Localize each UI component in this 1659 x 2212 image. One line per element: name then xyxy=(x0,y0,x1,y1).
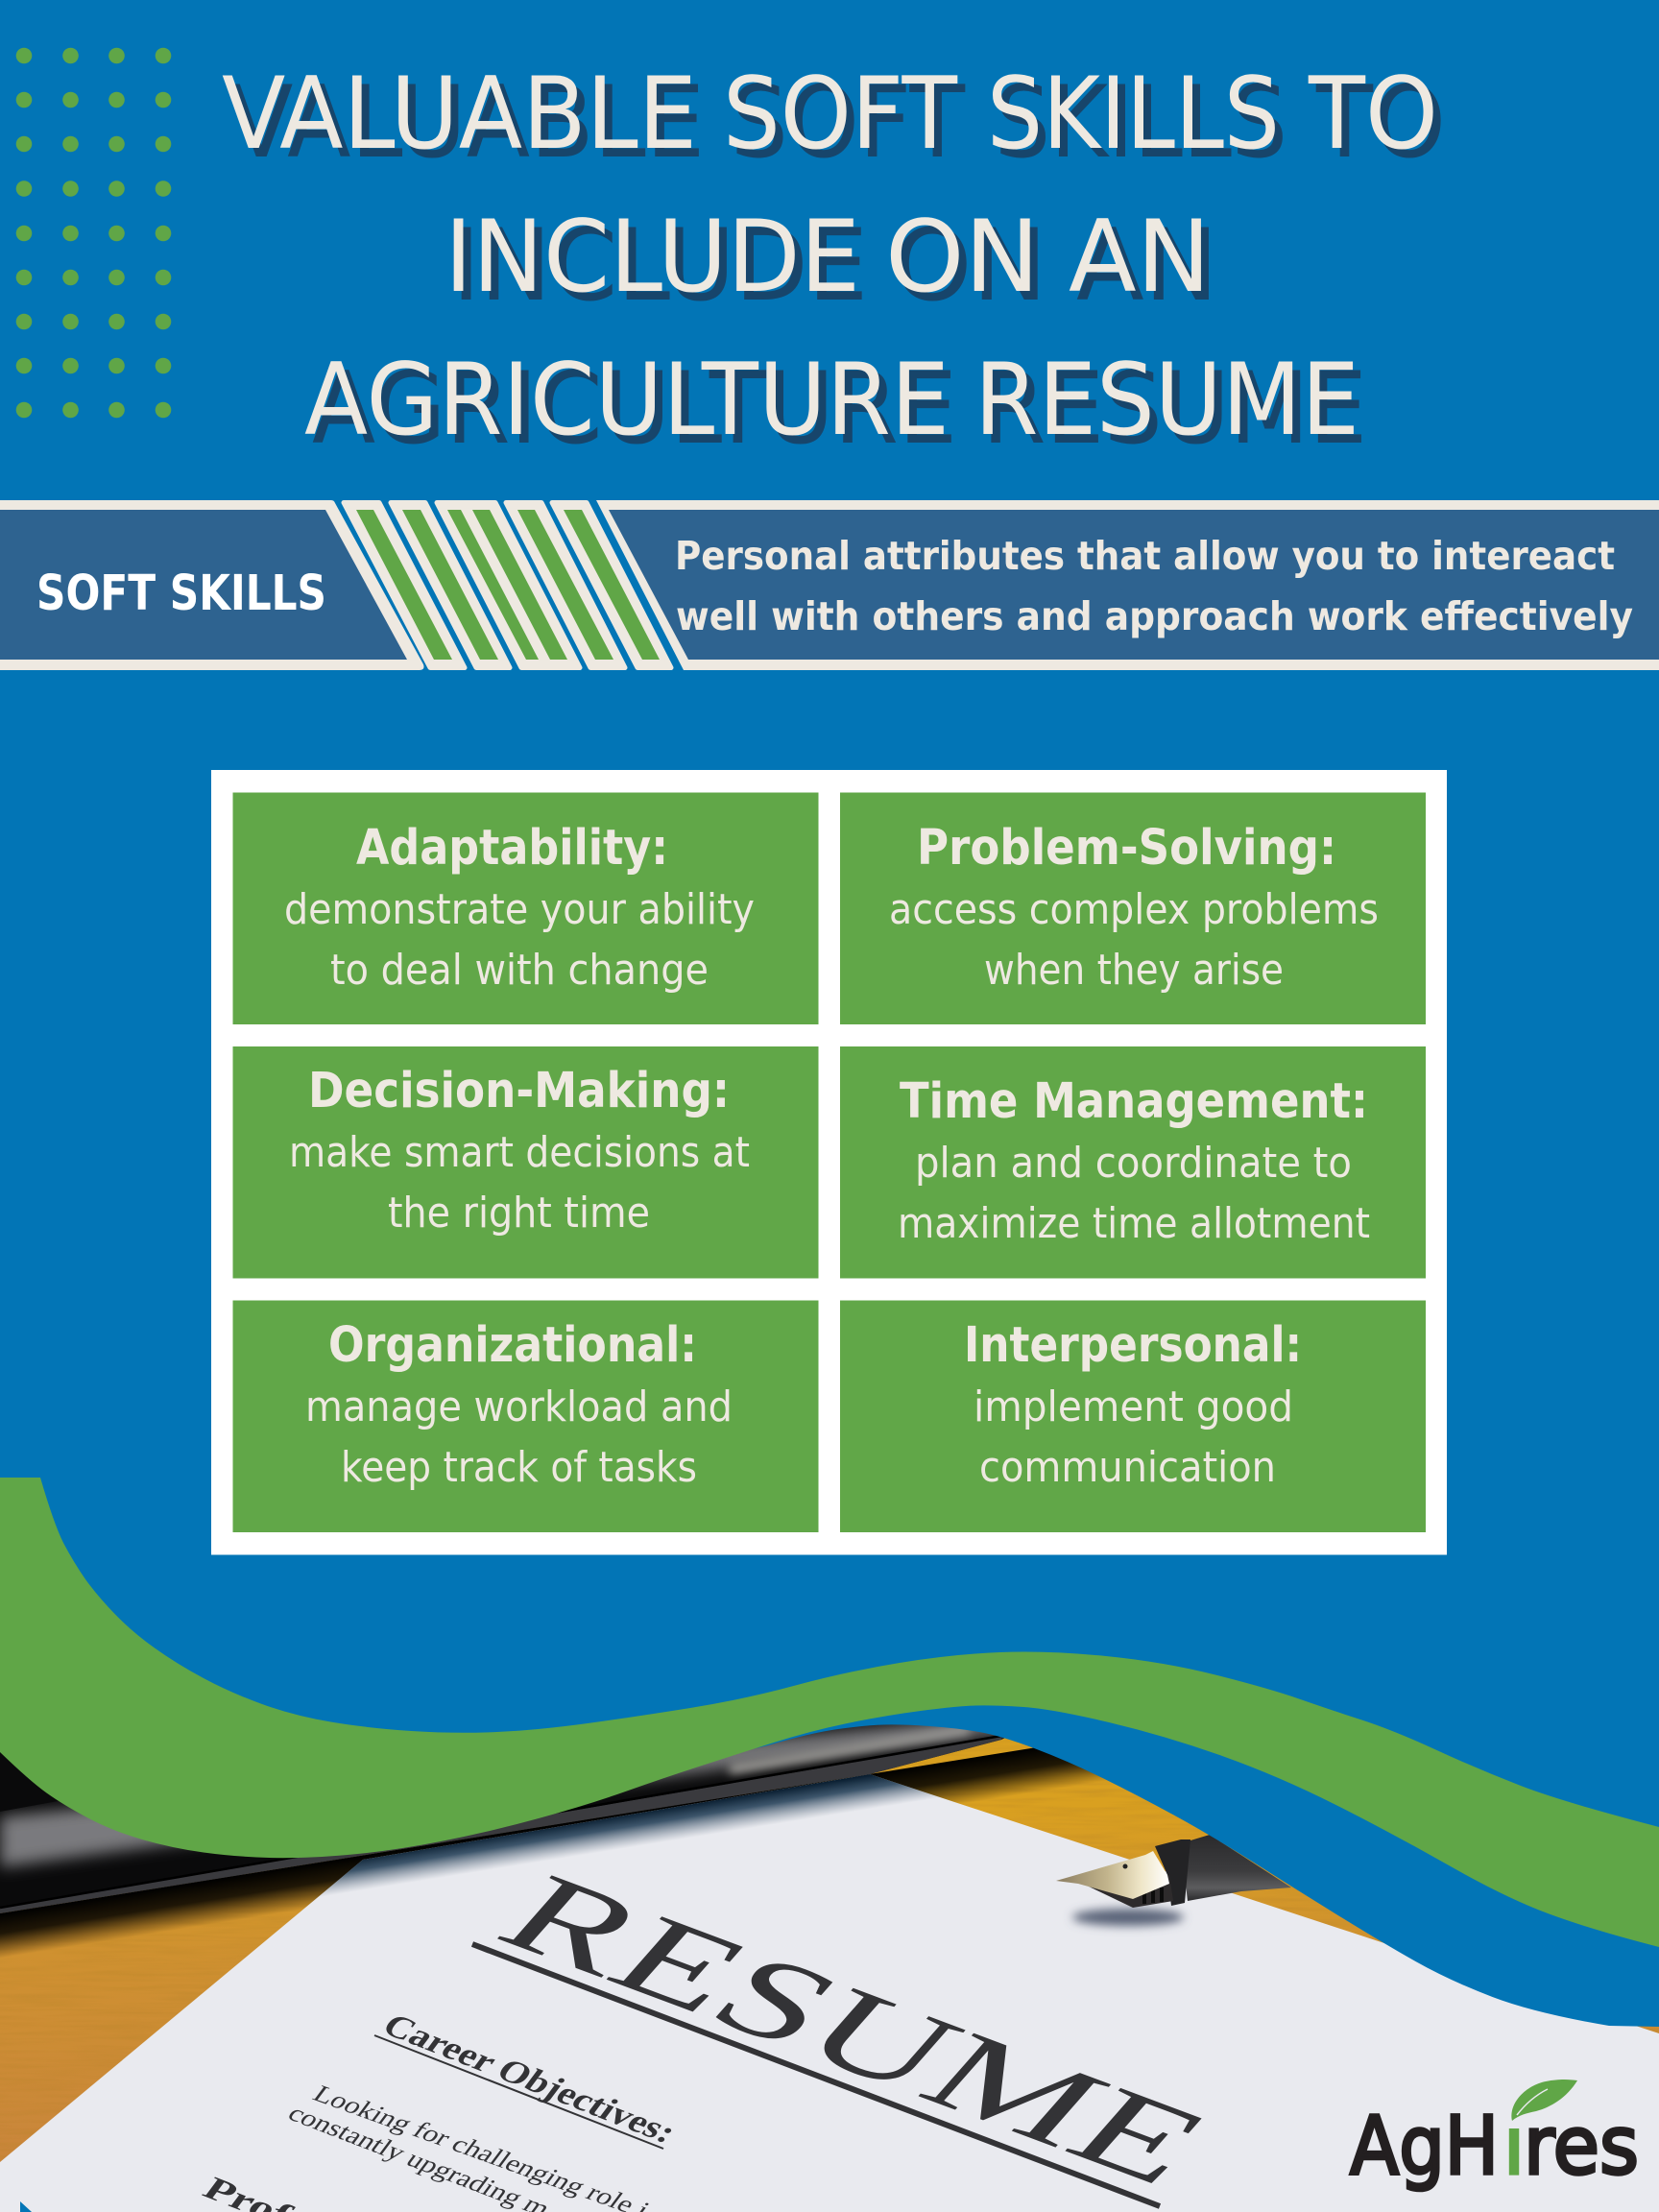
grid frame xyxy=(211,770,1447,1555)
logo wordmark xyxy=(1348,2113,1637,2193)
cell: interpersonal xyxy=(840,1300,1426,1532)
small blue corner xyxy=(20,2201,32,2212)
icon: leaf xyxy=(1511,2080,1577,2121)
cell: interpersonal: Interpersonal: xyxy=(964,1317,1302,1374)
cell: adaptability: Adaptability: xyxy=(356,820,668,877)
cell: organizational: Organizational: xyxy=(328,1317,697,1374)
cell: problem-solving: Problem-Solving: xyxy=(917,820,1336,877)
cell: problem-solving: access complex problems xyxy=(889,885,1379,934)
title: ON xyxy=(885,200,1040,315)
RESUME underline xyxy=(472,1944,1160,2206)
title: TO xyxy=(1308,57,1438,172)
wood desk xyxy=(0,1709,1659,2212)
photo: resume on desk xyxy=(0,1671,1659,2212)
career objectives heading: Career Objectives: xyxy=(375,2007,685,2150)
paper sheet xyxy=(0,1728,1659,2212)
title: SKILLS xyxy=(987,57,1280,172)
cell: adaptability xyxy=(232,793,818,1024)
title: AGRICULTURE xyxy=(304,343,950,458)
black folder xyxy=(0,1724,1004,1913)
cell: decision-making: the right time xyxy=(388,1189,650,1238)
cell: time management: plan and coordinate to xyxy=(915,1139,1352,1188)
banner right panel xyxy=(596,500,1659,670)
RESUME heading on paper: RESUME xyxy=(473,1851,1237,2208)
resume body line two: constantly upgrading m xyxy=(282,2100,556,2212)
banner description xyxy=(675,533,1633,639)
logo wordmark: res xyxy=(1524,2099,1639,2193)
cell: decision-making: make smart decisions at xyxy=(289,1128,750,1177)
cell: problem-solving: when they arise xyxy=(984,946,1284,995)
cell: time management xyxy=(840,1046,1426,1279)
cell: organizational xyxy=(232,1300,818,1532)
title xyxy=(222,57,1438,458)
green wave xyxy=(0,1478,1659,1947)
cell: interpersonal: communication xyxy=(979,1443,1276,1492)
skills grid xyxy=(211,770,1447,1555)
title: AN xyxy=(1069,200,1211,315)
decorative dot grid xyxy=(16,48,171,418)
cell: decision-making xyxy=(232,1046,818,1279)
icon: fountain pen xyxy=(1056,1835,1291,1926)
banner label: SOFT SKILLS xyxy=(36,565,326,622)
cell: time management: Time Management: xyxy=(900,1073,1368,1130)
resume body line one: Looking for challenging role i xyxy=(307,2080,655,2212)
cell: organizational: manage workload and xyxy=(305,1382,733,1431)
cell: adaptability: demonstrate your ability xyxy=(284,885,755,934)
title: INCLUDE xyxy=(445,200,860,315)
title: RESUME xyxy=(974,343,1359,458)
banner: soft skills definition xyxy=(0,500,1659,670)
career objectives underline xyxy=(374,2035,663,2149)
title: SOFT xyxy=(723,57,958,172)
banner stripes xyxy=(344,503,671,668)
banner left panel xyxy=(0,500,424,670)
logo: AgHires xyxy=(1350,2080,1639,2193)
title: VALUABLE xyxy=(222,57,697,172)
cell: adaptability: to deal with change xyxy=(330,946,709,995)
logo wordmark: AgH xyxy=(1350,2099,1499,2193)
cell: organizational: keep track of tasks xyxy=(341,1443,697,1492)
logo wordmark: i xyxy=(1503,2099,1525,2193)
cell: time management: maximize time allotment xyxy=(898,1199,1370,1248)
cell: interpersonal: implement good xyxy=(974,1382,1293,1431)
cell: problem-solving xyxy=(840,793,1426,1024)
cell: decision-making: Decision-Making: xyxy=(308,1063,730,1119)
